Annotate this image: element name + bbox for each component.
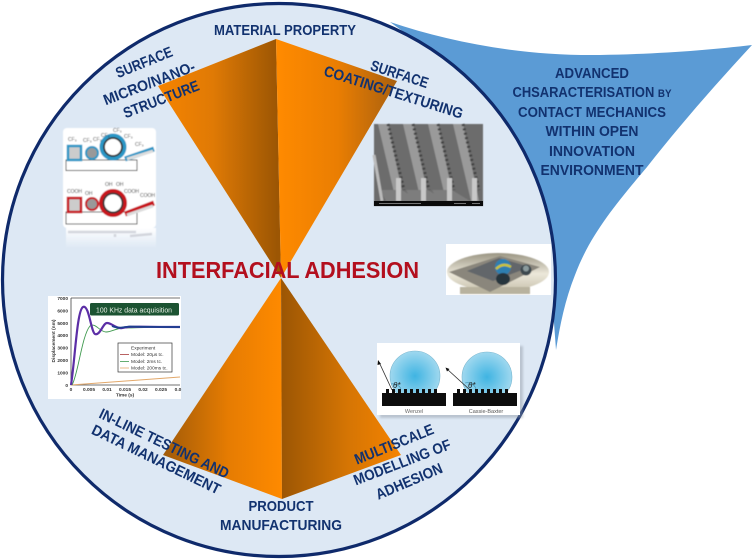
label: surface micro/nano-structure: SURFACE xyxy=(113,44,175,82)
image: droplet on sample photograph xyxy=(446,244,551,295)
callout text: advanced characterisation: CONTACT MECHANICS xyxy=(518,105,666,121)
image: surface chemistry diagrams: COOH xyxy=(67,189,82,195)
callout: blue wedge xyxy=(390,22,752,350)
chart axis labels: 1000 xyxy=(57,370,68,376)
chart axis labels: 0.025 xyxy=(155,387,167,393)
chart axis labels: 0 xyxy=(65,383,68,389)
chart axis labels: 0.005 xyxy=(83,387,95,393)
image: surface chemistry diagrams: OH xyxy=(105,182,113,188)
chart: displacement vs time xyxy=(48,296,182,399)
image: surface chemistry diagrams: OH xyxy=(116,182,124,188)
hourglass: orange cones xyxy=(158,39,401,499)
series: model 2ms xyxy=(72,325,180,385)
image: surface chemistry diagrams: OH xyxy=(85,191,93,197)
label: surface micro/nano-structure xyxy=(101,44,202,122)
label: surface coating/texturing: COATING/TEXTURING xyxy=(322,63,465,123)
image: surface chemistry diagrams: COOH xyxy=(140,193,155,199)
label: multiscale modelling of adhesion: MODELLING OF xyxy=(351,436,454,489)
series: model 200ms xyxy=(71,377,180,385)
chart axis labels: 0.01 xyxy=(102,387,112,393)
chart plot frame xyxy=(71,298,180,385)
image: Wenzel and Cassie-Baxter droplets: θ* xyxy=(468,381,476,390)
label: multiscale modelling of adhesion: ADHESION xyxy=(373,460,445,504)
label: in-line testing and data management: IN-LINE TESTING AND xyxy=(96,405,232,482)
label: product manufacturing: PRODUCT xyxy=(248,498,314,515)
callout text: advanced characterisation: ENVIRONMENT xyxy=(540,163,644,179)
chart legend xyxy=(118,343,172,372)
chart axis labels: 0.015 xyxy=(119,387,131,393)
chart axis labels: 0.02 xyxy=(138,387,148,393)
chart axis labels: 2000 xyxy=(57,358,68,364)
image: SEM micrograph xyxy=(374,124,483,206)
image: surface chemistry diagrams: CF₃ xyxy=(124,134,133,140)
label: surface micro/nano-structure: MICRO/NANO- xyxy=(101,58,198,109)
chart axis labels: Displacement (nm) xyxy=(51,319,57,362)
image: surface chemistry diagrams: CF₃ xyxy=(93,137,102,143)
image: Wenzel and Cassie-Baxter droplets: Cassie-Baxter xyxy=(469,409,503,415)
chart legend: Experiment xyxy=(131,346,156,352)
callout text: advanced characterisation: INNOVATION xyxy=(549,144,635,160)
chart axis labels: Time (s) xyxy=(116,392,135,398)
image: surface chemistry diagrams: CF₃ xyxy=(135,142,144,148)
image: surface chemistry diagrams: CF₃ xyxy=(68,137,77,143)
chart legend: Model: 200ms tc. xyxy=(131,366,168,372)
label: product manufacturing: MANUFACTURING xyxy=(220,517,342,534)
label: multiscale modelling of adhesion: MULTISCALE xyxy=(352,421,436,468)
label: product manufacturing xyxy=(220,498,342,534)
chart axis labels: 0 xyxy=(70,387,73,393)
chart axis labels: 0.0 xyxy=(175,387,182,393)
chart legend: Model: 2ms tc. xyxy=(131,359,162,365)
chart axis labels: 3000 xyxy=(57,346,68,352)
callout text: advanced characterisation: WITHIN OPEN xyxy=(546,124,638,140)
label: in-line testing and data management: DATA MANAGEMENT xyxy=(89,422,223,498)
chart legend: Model: 20μs tc. xyxy=(131,352,164,358)
chart axis labels xyxy=(51,296,182,398)
image: Wenzel and Cassie-Baxter droplets: Wenzel xyxy=(405,409,423,415)
chart axis labels: 5000 xyxy=(57,321,68,327)
image: surface chemistry diagrams: CF₃ xyxy=(83,138,92,144)
image: surface chemistry diagrams: COOH xyxy=(124,189,139,195)
label: surface coating/texturing: SURFACE xyxy=(368,57,431,92)
heading: material property: MATERIAL PROPERTY xyxy=(214,22,356,39)
panel: main circle xyxy=(2,4,556,556)
callout text: advanced characterisation: ADVANCED xyxy=(555,66,629,82)
chart axis labels: 6000 xyxy=(57,308,68,314)
image: surface chemistry diagrams xyxy=(63,128,156,248)
chart banner: 100 KHz data acquisition xyxy=(96,306,172,314)
image: surface chemistry diagrams: CF₃ xyxy=(101,133,110,139)
callout text: advanced characterisation xyxy=(512,66,672,179)
image: surface chemistry diagrams: CF₃ xyxy=(113,128,122,134)
chart axis labels: 7000 xyxy=(57,296,68,302)
series: experiment xyxy=(71,307,180,385)
image: Wenzel and Cassie-Baxter droplets: θ* xyxy=(393,381,401,390)
title: interfacial adhesion: INTERFACIAL ADHESION xyxy=(156,257,419,283)
chart axis labels: 4000 xyxy=(57,333,68,339)
callout text: advanced characterisation: CHSARACTERISATION BY xyxy=(512,85,672,101)
label: multiscale modelling of adhesion xyxy=(351,421,454,504)
label: surface micro/nano-structure: STRUCTURE xyxy=(121,78,202,122)
image: Wenzel and Cassie-Baxter droplets xyxy=(377,343,523,418)
